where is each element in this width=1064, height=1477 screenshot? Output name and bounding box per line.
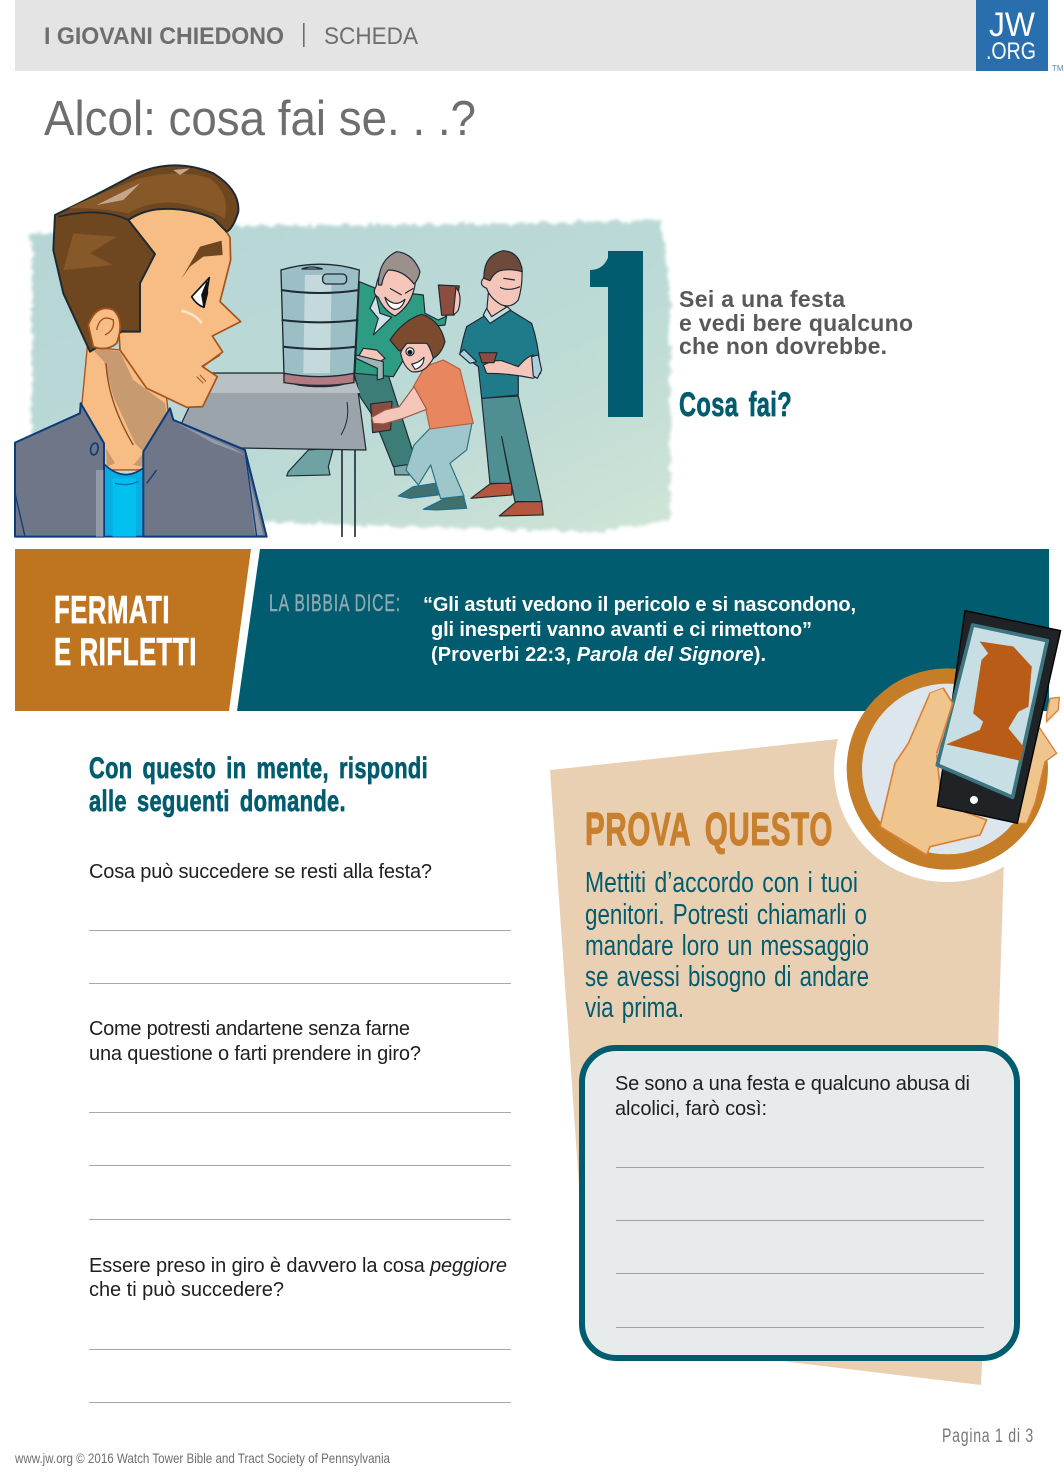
- table legs: [342, 448, 355, 537]
- try this text: [585, 867, 869, 1024]
- try this text: se avessi bisogno di andare: [585, 961, 869, 993]
- questions heading: [89, 752, 428, 818]
- panel: Bible quote: “Gli astuti vedono il pericolo e si nascondono,: [423, 594, 856, 616]
- icon: hand holding phone: [854, 611, 1061, 862]
- number 1: [590, 251, 643, 417]
- friends group: [287, 251, 543, 516]
- panel: stop and think: E RIFLETTI: [54, 631, 197, 674]
- logo: JW.ORG: [976, 0, 1064, 73]
- try this text: via prima.: [585, 992, 684, 1024]
- young man: [15, 165, 267, 537]
- question: Cosa fai?: Cosa fai?: [679, 386, 792, 424]
- page title: Alcol: cosa fai se. . .?: [44, 92, 476, 146]
- ear: [88, 308, 120, 349]
- shirt: [103, 463, 147, 537]
- keg: [281, 264, 359, 387]
- panel: Bible quote: [237, 549, 1049, 711]
- try this text: genitori. Potresti chiamarli o: [585, 899, 867, 931]
- number 1: 1: [533, 212, 659, 465]
- panel: my plan: alcolici, farò così:: [615, 1098, 767, 1120]
- question 1: Cosa può succedere se resti alla festa?: [89, 861, 432, 883]
- try this heading: PROVA QUESTO: [585, 803, 833, 855]
- panel: Bible quote: gli inesperti vanno avanti e ci rimettono”: [431, 619, 812, 641]
- logo: JW.ORG: TM: [1052, 64, 1064, 73]
- question 2: [89, 1018, 511, 1220]
- man in blue: [459, 251, 543, 516]
- scenario text: che non dovrebbe.: [679, 333, 887, 359]
- question 3: [89, 1255, 511, 1402]
- question 2: una questione o farti prendere in giro?: [89, 1043, 421, 1065]
- try this text: Mettiti d’accordo con i tuoi: [585, 867, 858, 899]
- face: [100, 206, 241, 407]
- logo: JW.ORG: .ORG: [986, 38, 1036, 65]
- neck: [82, 347, 168, 470]
- panel: stop and think: FERMATI: [54, 589, 170, 632]
- panel: stop and think: [15, 549, 251, 711]
- scenario text: Sei a una festa: [679, 286, 845, 312]
- green man: [287, 252, 460, 476]
- panel: peach background: [550, 739, 1004, 1385]
- hair: [53, 165, 238, 352]
- white halo: [834, 656, 1060, 882]
- question 3: Essere preso in giro è davvero la cosa peggiore: [89, 1255, 507, 1277]
- illustration: party scene: [15, 165, 670, 537]
- panel: Bible quote: LA BIBBIA DICE:: [269, 590, 401, 617]
- question 2: Come potresti andartene senza farne: [89, 1018, 410, 1040]
- neck shadow: [90, 347, 167, 452]
- questions heading: Con questo in mente, rispondi: [89, 752, 428, 785]
- page number: Pagina 1 di 3: [942, 1426, 1034, 1447]
- boy at the tap: [371, 314, 473, 510]
- question 3: che ti può succedere?: [89, 1279, 284, 1301]
- table with cloth: [170, 373, 366, 450]
- question 1: [89, 861, 511, 984]
- header band: [15, 0, 976, 71]
- eye and brow: [182, 241, 223, 278]
- header label: SCHEDA: [324, 23, 418, 50]
- footer copyright: www.jw.org © 2016 Watch Tower Bible and Tract Society of Pennsylvania: [14, 1450, 390, 1466]
- panel: my plan: [582, 1048, 1017, 1358]
- logo: JW.ORG: JW: [989, 6, 1035, 44]
- header title: I GIOVANI CHIEDONO: [44, 23, 284, 50]
- scenario text: e vedi bere qualcuno: [679, 310, 913, 336]
- scenario text: [679, 286, 913, 359]
- questions heading: alle seguenti domande.: [89, 785, 346, 818]
- jacket: [15, 403, 104, 537]
- panel: Bible quote: (Proverbi 22:3, Parola del Signore).: [431, 644, 766, 666]
- panel: my plan: Se sono a una festa e qualcuno abusa di: [615, 1073, 970, 1095]
- try this text: mandare loro un messaggio: [585, 930, 869, 962]
